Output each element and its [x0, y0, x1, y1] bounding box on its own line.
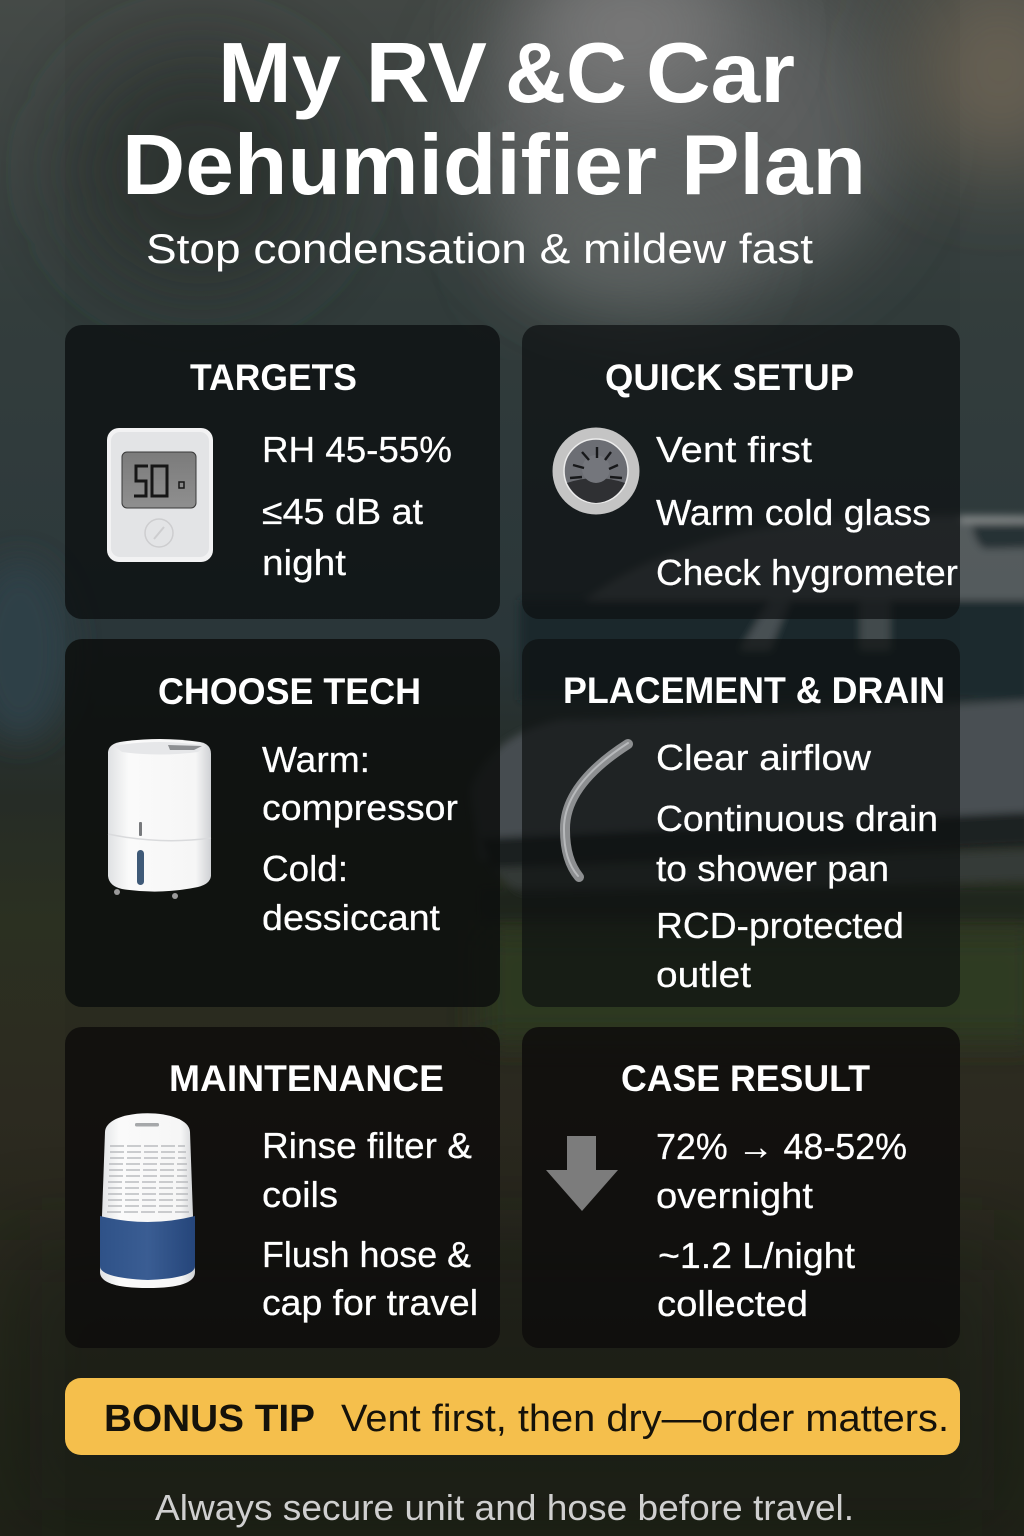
text: maintenance list — [262, 1125, 478, 1323]
RV shape — [470, 515, 1024, 920]
text: case result list: collected — [657, 1283, 808, 1324]
text: placement list: RCD-protected — [656, 905, 904, 946]
icon: hygrometer — [107, 428, 213, 562]
heading: placement and drain: PLACEMENT & DRAIN — [563, 670, 945, 711]
text: placement list: Continuous drain — [656, 798, 938, 839]
text: targets list: ≤45 dB at — [262, 491, 423, 532]
heading: choose tech: CHOOSE TECH — [158, 671, 421, 712]
icon: compressor dehumidifier — [108, 739, 211, 899]
title: Car — [646, 26, 795, 121]
icon: roof vent — [552, 428, 640, 514]
icon: desiccant dehumidifier — [100, 1113, 195, 1288]
text: placement list: to shower pan — [656, 848, 889, 889]
callout: bonus tip — [65, 1378, 960, 1455]
icon: down arrow — [546, 1136, 618, 1211]
subtitle: Stop condensation & mildew fast — [146, 225, 813, 272]
panel: maintenance — [65, 1027, 500, 1348]
heading: case result: CASE RESULT — [621, 1058, 870, 1099]
panel: targets — [65, 325, 500, 619]
heading: quick setup: QUICK SETUP — [605, 357, 854, 398]
heading: maintenance: MAINTENANCE — [169, 1058, 444, 1099]
text: case result list: 72% → 48-52% — [656, 1126, 907, 1167]
text: choose tech list: dessiccant — [262, 897, 440, 938]
panel: placement and drain — [522, 639, 960, 1007]
title: Dehumidifier Plan — [122, 118, 866, 213]
text: quick setup list: Check hygrometer — [656, 552, 958, 593]
panel: choose tech — [65, 639, 500, 1007]
text: placement list — [656, 737, 938, 995]
text: case result list: ~1.2 L/night — [658, 1235, 855, 1276]
text: targets list: RH 45-55% — [262, 429, 452, 470]
text: quick setup list: Vent first — [656, 429, 812, 470]
title: &C — [505, 26, 627, 121]
text: maintenance list: coils — [262, 1174, 338, 1215]
panel: quick setup — [522, 325, 960, 619]
panel: case result — [522, 1027, 960, 1348]
callout: bonus tip: Vent first, then dry—order matters. — [341, 1398, 949, 1440]
heading: targets: TARGETS — [190, 357, 357, 398]
icon: drain hose — [564, 743, 628, 877]
text: case result list: overnight — [656, 1175, 813, 1216]
text: choose tech list — [262, 739, 458, 938]
title: My RV — [218, 26, 487, 121]
text: targets list: night — [262, 542, 346, 583]
callout: bonus tip: BONUS TIP — [104, 1398, 315, 1440]
footer note: Always secure unit and hose before travel. — [155, 1487, 854, 1528]
text: quick setup list — [656, 429, 958, 593]
text: choose tech list: compressor — [262, 787, 458, 828]
text: quick setup list: Warm cold glass — [656, 492, 931, 533]
text: choose tech list: Cold: — [262, 848, 348, 889]
text: targets list — [262, 429, 452, 583]
text: maintenance list: Rinse filter & — [262, 1125, 472, 1166]
text: choose tech list: Warm: — [262, 739, 370, 780]
text: case result list — [656, 1126, 907, 1324]
text: maintenance list: cap for travel — [262, 1282, 478, 1323]
title — [122, 26, 866, 213]
text: placement list: outlet — [656, 954, 751, 995]
text: maintenance list: Flush hose & — [262, 1234, 471, 1275]
text: placement list: Clear airflow — [656, 737, 872, 778]
